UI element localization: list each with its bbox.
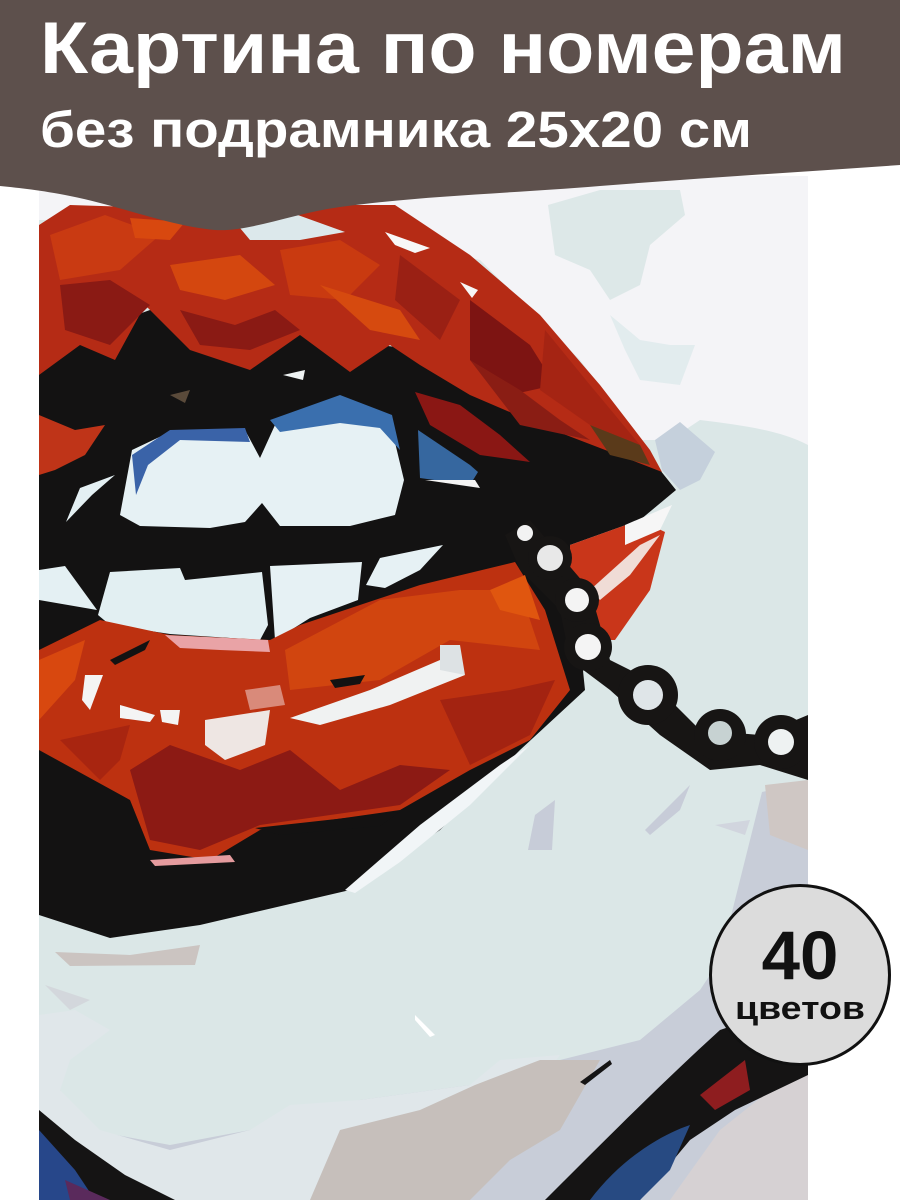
upper lip [39,205,662,475]
lower teeth [39,545,443,640]
badge number: 40 [762,917,838,994]
chain [505,520,808,780]
subtitle: без подрамника 25х20 см [40,101,752,158]
title: Картина по номерам [40,8,846,89]
upper teeth [66,395,480,528]
badge label: цветов [735,990,865,1026]
painting: lips with chain [39,176,808,1200]
white rim under lip [345,745,530,893]
lower lip [39,562,570,866]
mouth black [39,310,676,938]
lower background tones [39,780,808,1200]
header banner [0,0,900,230]
right lip corner [570,505,672,640]
badge: 40 colours [710,886,890,1064]
